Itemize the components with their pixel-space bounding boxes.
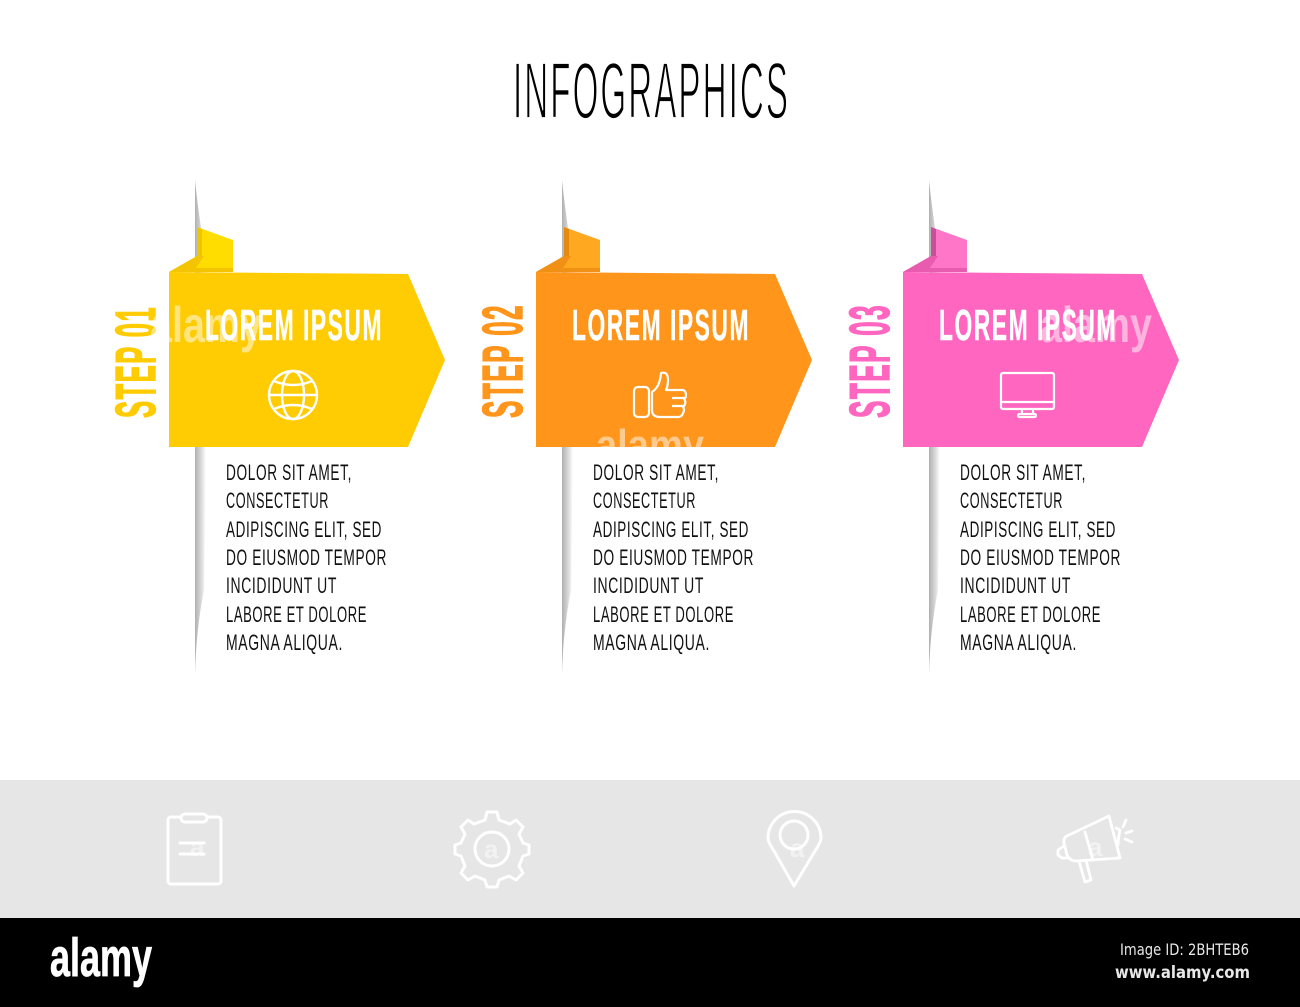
description: INCIDIDUNT UT [226, 573, 337, 598]
shadow line [929, 180, 940, 675]
panel: bottom icon band [0, 780, 1300, 918]
panel: step 01 [104, 180, 445, 675]
description: LABORE ET DOLORE [226, 602, 367, 627]
panel: step 02: STEP 02 [471, 304, 535, 418]
description: MAGNA ALIQUA. [960, 630, 1077, 655]
icon: gear [455, 812, 529, 887]
folded ribbon [169, 227, 233, 272]
description: LABORE ET DOLORE [593, 602, 734, 627]
description: MAGNA ALIQUA. [226, 630, 343, 655]
description: DOLOR SIT AMET, [593, 460, 719, 485]
arrow banner [903, 272, 1179, 447]
folded ribbon [903, 227, 967, 272]
watermark letters: a [790, 833, 805, 863]
panel: step 01: STEP 01 [104, 306, 168, 418]
description: ADIPISCING ELIT, SED [226, 517, 382, 542]
description [960, 460, 1121, 655]
panel: step 03 [838, 180, 1179, 675]
website: www.alamy.com [1115, 963, 1250, 983]
arrow banner [169, 272, 445, 447]
text: INFOGRAPHICS [513, 46, 790, 135]
panel: step 03: STEP 03 [838, 304, 902, 418]
folded ribbon [536, 227, 600, 272]
footer bar [0, 918, 1300, 1007]
description: ADIPISCING ELIT, SED [960, 517, 1116, 542]
logo: alamy [50, 928, 152, 988]
icon: thumbs up [634, 373, 686, 417]
description: CONSECTETUR [226, 488, 329, 513]
heading: LOREM IPSUM [572, 301, 750, 350]
watermark letters: a [484, 834, 499, 864]
description: DOLOR SIT AMET, [226, 460, 352, 485]
icon: monitor [1001, 373, 1054, 417]
watermark: alamy [1040, 297, 1152, 353]
watermark: alamy [150, 297, 262, 353]
icon: megaphone [1058, 816, 1132, 882]
shadow line [562, 180, 573, 675]
image id: Image ID: 2BHTEB6 [1120, 940, 1249, 959]
watermark letters: a [1088, 832, 1103, 862]
description: INCIDIDUNT UT [593, 573, 704, 598]
description: DO EIUSMOD TEMPOR [593, 545, 754, 570]
description: LABORE ET DOLORE [960, 602, 1101, 627]
icon: globe [269, 371, 317, 419]
description [226, 460, 387, 655]
description: CONSECTETUR [593, 488, 696, 513]
description: INCIDIDUNT UT [960, 573, 1071, 598]
watermark letters [190, 832, 1103, 864]
icon: clipboard [168, 814, 221, 884]
description [593, 460, 754, 655]
watermark: alamy [596, 421, 705, 468]
panel: step 02 [471, 180, 812, 675]
heading: LOREM IPSUM [939, 301, 1117, 350]
watermark letters: a [190, 832, 205, 862]
heading: LOREM IPSUM [205, 301, 383, 350]
arrow banner [536, 272, 812, 447]
description: ADIPISCING ELIT, SED [593, 517, 749, 542]
icon: map pin [768, 812, 821, 886]
description: DO EIUSMOD TEMPOR [226, 545, 387, 570]
description: DO EIUSMOD TEMPOR [960, 545, 1121, 570]
description: MAGNA ALIQUA. [593, 630, 710, 655]
description: DOLOR SIT AMET, [960, 460, 1086, 485]
description: CONSECTETUR [960, 488, 1063, 513]
shadow line [195, 180, 206, 675]
